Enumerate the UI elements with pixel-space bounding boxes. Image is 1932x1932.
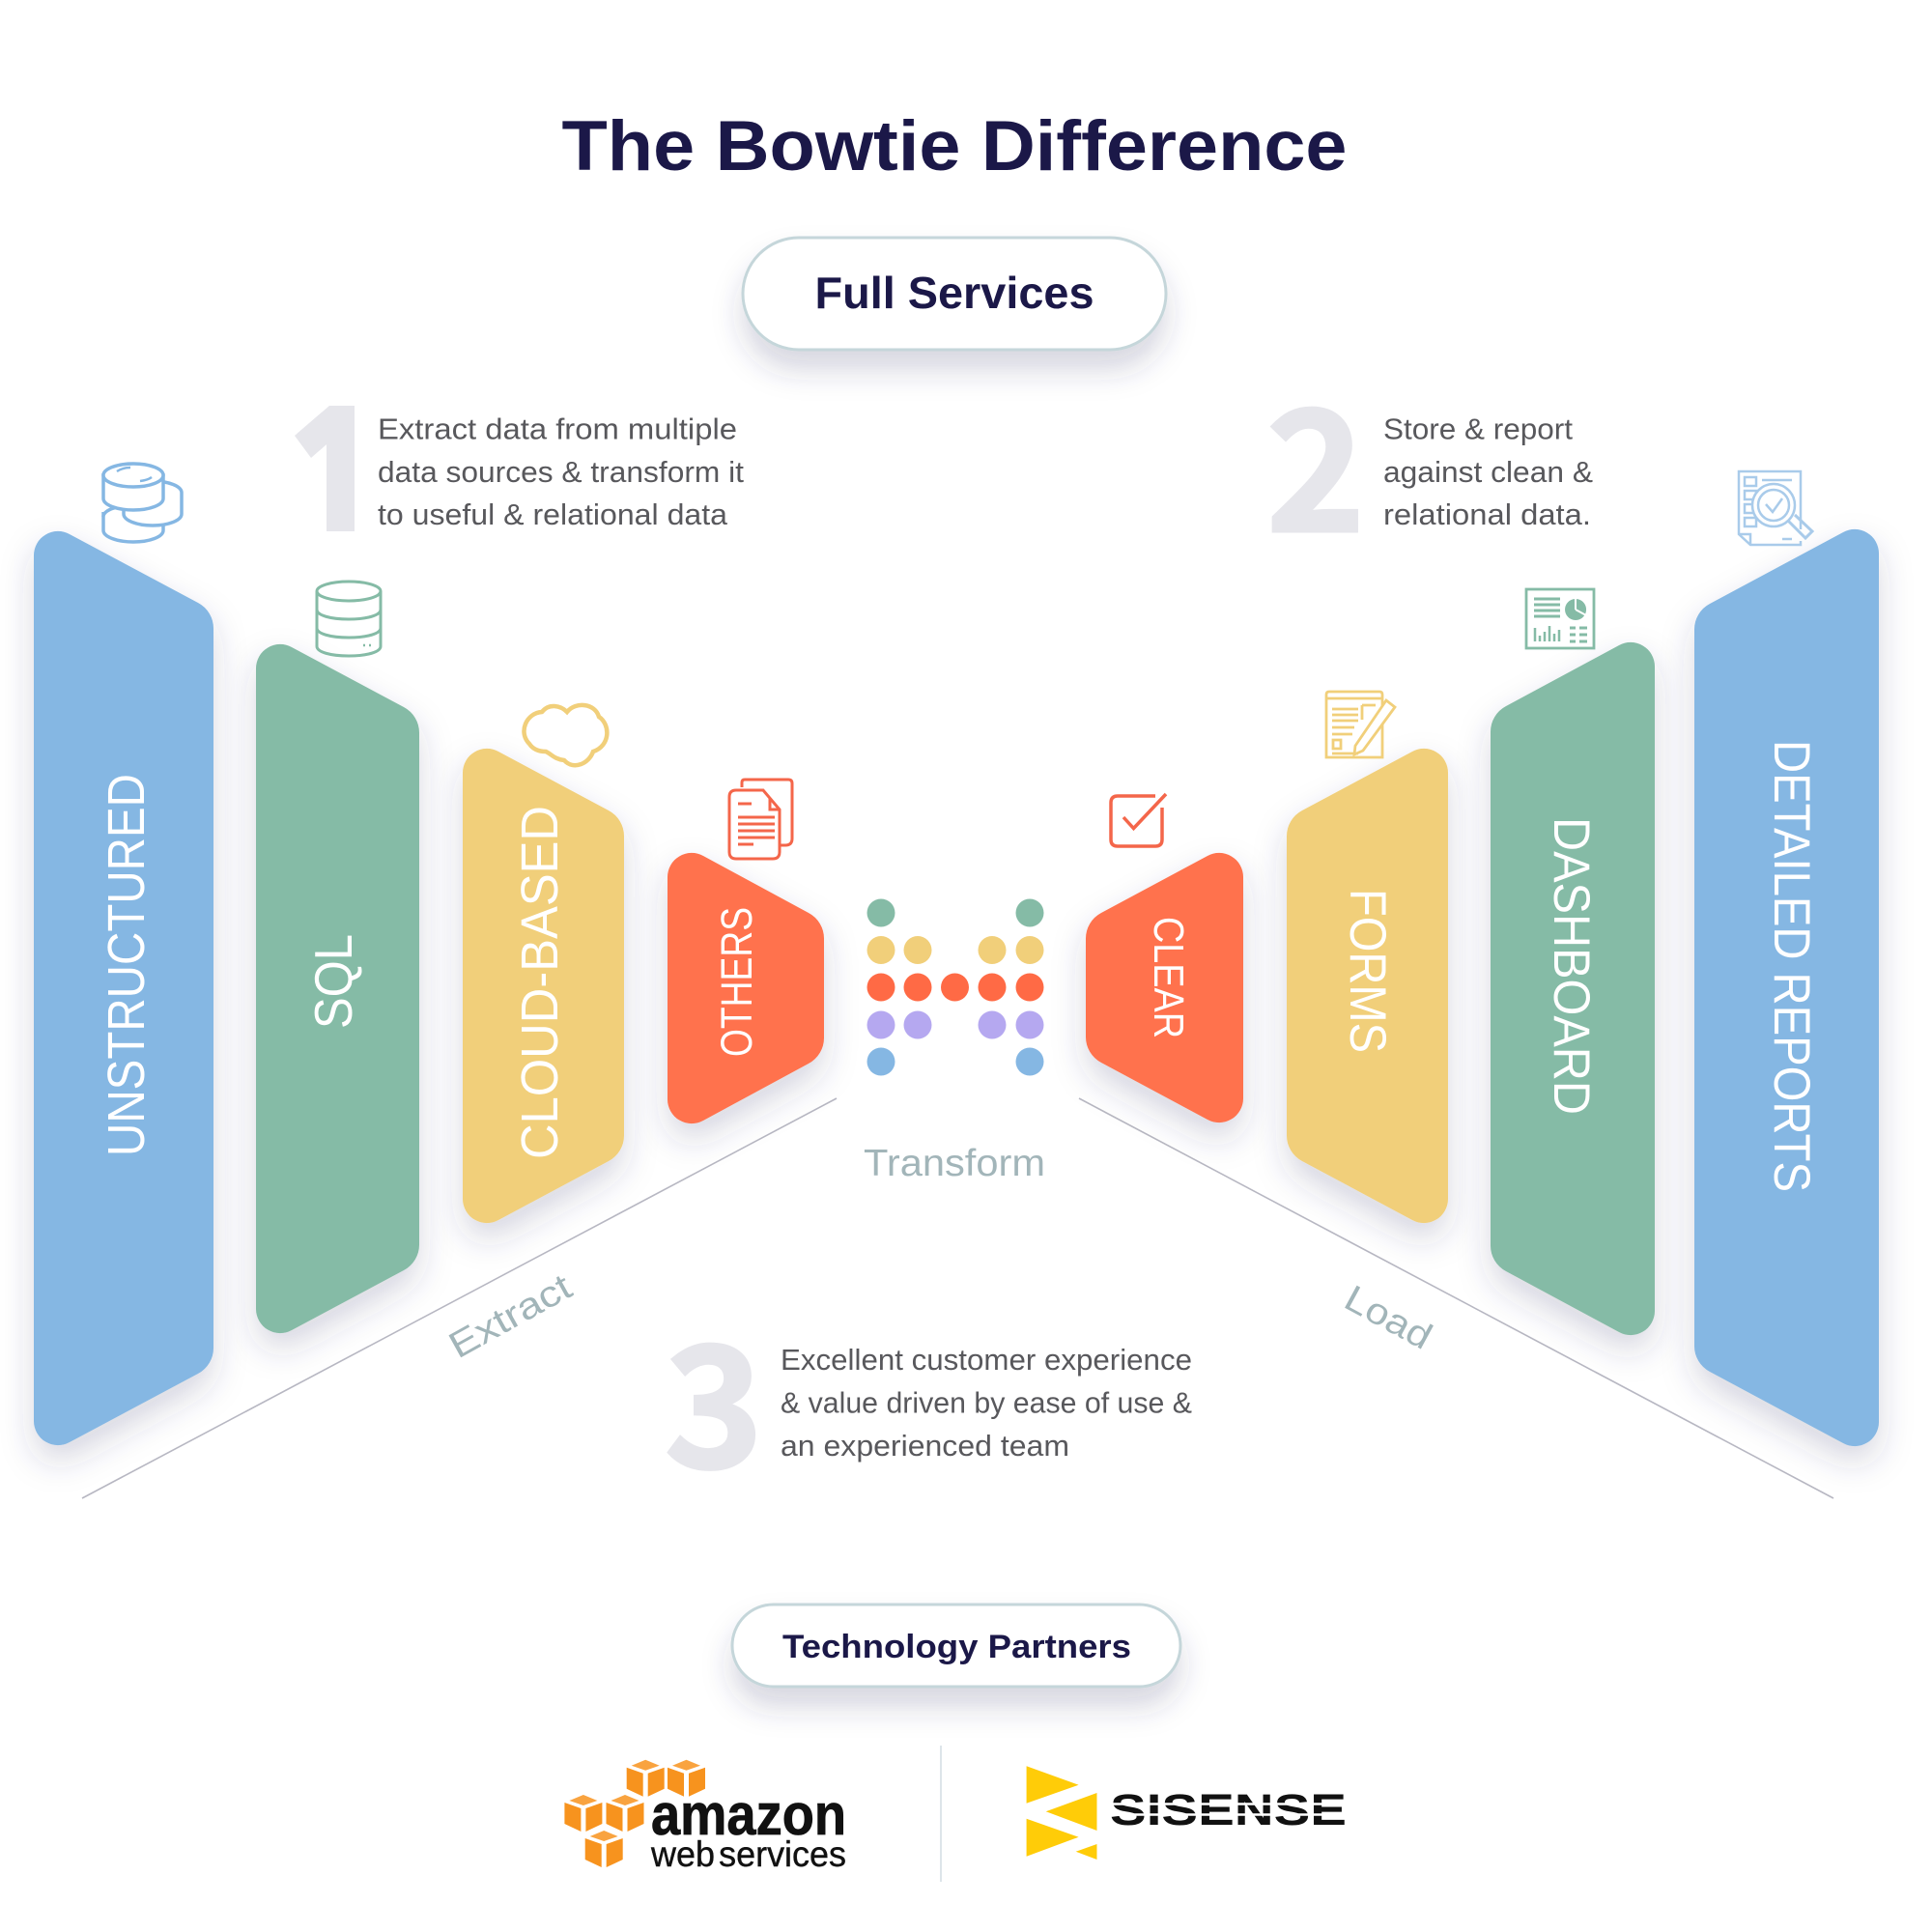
panel: forms: FORMS: [1339, 889, 1396, 1053]
panel: clear: [1086, 853, 1243, 1122]
panel: others: [668, 853, 824, 1123]
logo divider: [940, 1746, 942, 1882]
step 2 text block: [1266, 337, 1593, 581]
extract axis line: [82, 1098, 837, 1498]
icon: coins: [103, 464, 182, 542]
icon: database: [317, 582, 381, 656]
step 2 text block: Store & report: [1383, 412, 1573, 446]
step 1 text block: [279, 337, 744, 581]
pill: full services: Full Services: [815, 268, 1094, 318]
step 2 text block: 2: [1266, 337, 1365, 581]
step 1 text block: to useful & relational data: [378, 497, 728, 531]
label: extract: Extract: [442, 1266, 580, 1367]
panel: forms: [1287, 749, 1448, 1223]
load axis line: [1079, 1098, 1833, 1498]
panel: dashboard: DASHBOARD: [1543, 817, 1600, 1115]
panel: detailed reports: DETAILED REPORTS: [1763, 740, 1820, 1192]
pill: technology partners: Technology Partners: [782, 1629, 1131, 1665]
step 3 text block: Excellent customer experience: [781, 1343, 1192, 1377]
step 1 text block: Extract data from multiple: [378, 412, 737, 446]
panel: others: OTHERS: [712, 907, 761, 1057]
panel: cloud-based: CLOUD-BASED: [511, 806, 569, 1159]
icon: documents: [729, 780, 792, 859]
logo: sisense: [1027, 1766, 1349, 1860]
step 1 text block: 1: [279, 337, 378, 581]
label: load: Load: [1338, 1278, 1438, 1358]
icon: checkbox: [1111, 794, 1166, 846]
pill: full services: [743, 238, 1166, 350]
icon: magnified report: [1739, 471, 1812, 545]
step 2 text block: relational data.: [1383, 497, 1591, 531]
transform dots: [867, 898, 1043, 1076]
panel: cloud-based: [463, 749, 624, 1223]
step 3 text block: 3: [665, 1273, 763, 1517]
logo: sisense: SISENSE: [1110, 1785, 1347, 1834]
step 1 text block: data sources & transform it: [378, 455, 744, 489]
step 2 text block: against clean &: [1383, 455, 1593, 489]
icon: form with pencil: [1326, 692, 1395, 757]
panel: dashboard: [1491, 642, 1655, 1335]
logo: amazon web services: web services: [650, 1834, 846, 1874]
pill: technology partners: [732, 1605, 1180, 1687]
panel: sql: [256, 644, 419, 1333]
step 3 text block: & value driven by ease of use &: [781, 1385, 1192, 1420]
label: transform: Transform: [864, 1143, 1045, 1184]
title: The Bowtie Difference: [562, 107, 1347, 185]
step 3 text block: [665, 1273, 1192, 1517]
logo: amazon web services: [564, 1760, 846, 1874]
step 3 text block: an experienced team: [781, 1429, 1069, 1463]
panel: clear: CLEAR: [1145, 917, 1192, 1038]
panel: unstructured: UNSTRUCTURED: [98, 774, 156, 1156]
icon: cloud: [524, 705, 607, 765]
panel: detailed reports: [1694, 529, 1879, 1446]
icon: dashboard report: [1526, 589, 1594, 648]
panel: sql: SQL: [303, 934, 363, 1029]
panel: unstructured: [34, 531, 213, 1445]
logo: amazon web services: amazon: [651, 1782, 846, 1847]
